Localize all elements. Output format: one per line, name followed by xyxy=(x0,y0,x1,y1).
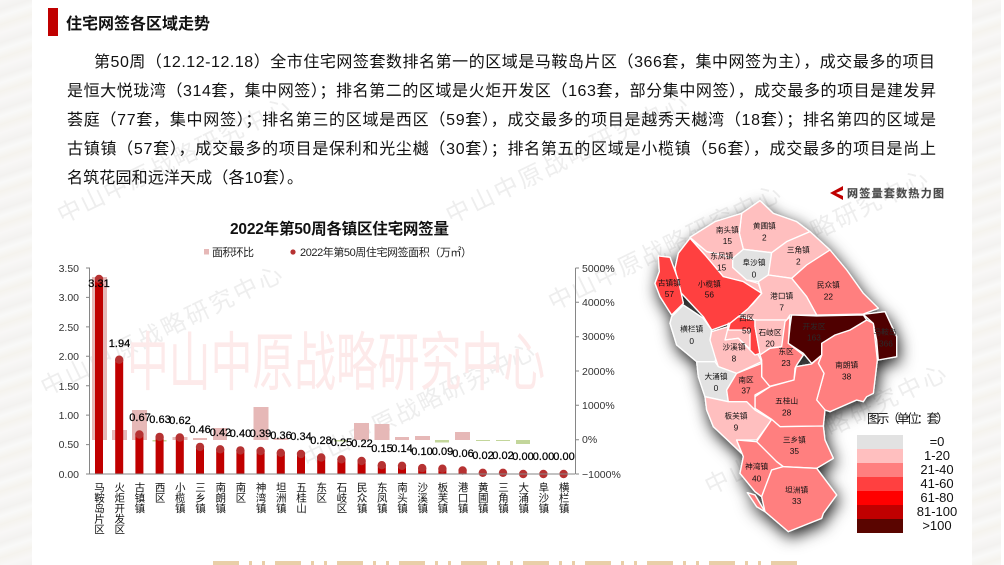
data labels: 0.02 xyxy=(472,450,494,462)
body paragraph: 荟庭（77套，集中网签）；排名第三的区域是西区（59套），成交最多的项目是越秀天樾湾（18套）；排名第四的区域是 xyxy=(67,106,936,130)
map region labels: 开发区 xyxy=(803,321,826,331)
category labels: 民众镇 xyxy=(356,482,368,514)
watermarks: 中山中原战略研究中心 xyxy=(701,360,951,500)
right axis labels: 0% xyxy=(582,434,597,446)
map region labels: 西区 xyxy=(739,314,755,323)
map region labels: 163 xyxy=(807,333,821,343)
data labels: 0.25 xyxy=(331,437,352,449)
map region labels: 22 xyxy=(824,291,833,301)
right axis labels: −1000% xyxy=(582,469,621,481)
left axis labels: 2.00 xyxy=(59,351,79,363)
data labels: 0.42 xyxy=(210,427,231,439)
category labels: 黄圃镇 xyxy=(477,481,489,514)
map legend xyxy=(857,408,957,533)
map region labels: 阜沙镇 xyxy=(743,257,766,267)
category labels: 小榄镇 xyxy=(174,482,186,514)
map region labels: 沙溪镇 xyxy=(723,342,746,352)
category labels: 三角镇 xyxy=(497,482,509,514)
map region labels: 2 xyxy=(762,233,767,243)
large pink watermark: 中山中原战略研究中心 xyxy=(127,327,545,399)
map region labels: 40 xyxy=(752,473,762,483)
map region labels: 板芙镇 xyxy=(725,411,748,421)
heat map xyxy=(655,201,897,532)
chart title: 2022年第50周各镇区住宅网签量 xyxy=(230,219,449,238)
left axis labels: 2.50 xyxy=(59,322,79,334)
category labels: 阜沙镇 xyxy=(537,481,549,514)
left axis labels: 3.50 xyxy=(59,263,79,275)
map region labels: 28 xyxy=(782,407,792,417)
map region labels: 南头镇 xyxy=(716,224,739,234)
map region labels: 民众镇 xyxy=(817,279,840,289)
category labels: 火炬开发区 xyxy=(113,482,125,534)
map region labels: 东区 xyxy=(778,346,794,356)
axes xyxy=(86,268,579,474)
map region labels: 0 xyxy=(689,336,694,346)
series: area change bars xyxy=(92,277,470,440)
category labels: 南头镇 xyxy=(396,481,408,514)
map region labels: 坦洲镇 xyxy=(785,484,808,494)
map region labels: 23 xyxy=(781,358,791,368)
map legend: >100 xyxy=(922,518,952,533)
map title: 网签量套数热力图 xyxy=(847,186,944,200)
body paragraph: 古镇镇（57套），成交最多的项目是保利和光尘樾（30套）；排名第五的区域是小榄镇（56套），成交最多的项目是尚上 xyxy=(67,135,936,159)
category labels: 横栏镇 xyxy=(558,481,570,514)
chart legend: 面积环比 xyxy=(212,246,254,259)
left axis labels xyxy=(59,263,79,481)
category labels: 古镇镇 xyxy=(133,481,145,514)
category labels: 沙溪镇 xyxy=(416,482,428,514)
category labels: 港口镇 xyxy=(457,482,469,514)
bar chart xyxy=(59,263,621,534)
map region labels: 35 xyxy=(790,446,799,456)
data labels: 0.28 xyxy=(310,435,332,447)
data labels: 0.09 xyxy=(432,446,453,458)
map region labels: 石岐区 xyxy=(759,327,782,337)
body paragraph xyxy=(67,48,936,188)
category labels: 神湾镇 xyxy=(255,481,267,514)
map legend: 1-20 xyxy=(924,448,950,463)
category labels: 板芙镇 xyxy=(436,481,448,514)
right axis labels: 4000% xyxy=(582,297,615,309)
watermarks: 中山中原战略研究中心 xyxy=(298,338,539,474)
marble border right xyxy=(972,0,1001,565)
map legend: 图示（单位：套） xyxy=(867,408,949,427)
data labels: 0.62 xyxy=(169,415,191,427)
map region labels: 57 xyxy=(665,289,674,299)
map region labels: 20 xyxy=(765,339,775,349)
category labels: 南朗镇 xyxy=(214,481,226,514)
right axis labels: 1000% xyxy=(582,400,615,412)
map region labels: 南朗镇 xyxy=(835,360,858,370)
category labels: 东凤镇 xyxy=(376,481,388,514)
map region labels: 神湾镇 xyxy=(745,461,768,471)
category labels: 三乡镇 xyxy=(194,482,206,514)
watermarks: 中山中原战略研究中心 xyxy=(37,261,287,401)
map region labels: 366 xyxy=(879,338,893,348)
map region labels: 56 xyxy=(705,290,714,300)
data labels: 0.63 xyxy=(149,414,171,426)
chart legend: 2022年第50周住宅网签面积（万㎡） xyxy=(300,244,472,260)
map region labels: 东凤镇 xyxy=(710,250,733,260)
map region labels: 南区 xyxy=(738,374,754,384)
map region labels: 9 xyxy=(734,422,739,432)
chart legend xyxy=(204,244,472,260)
category labels: 石岐区 xyxy=(335,482,347,514)
category labels: 大涌镇 xyxy=(517,481,529,514)
data labels: 0.22 xyxy=(351,438,373,450)
data labels: 0.46 xyxy=(189,424,211,436)
data labels: 0.00 xyxy=(512,451,534,463)
heading marker xyxy=(48,8,58,36)
series: sales area markers xyxy=(95,275,568,478)
data labels: 0.15 xyxy=(371,443,393,455)
map legend: 21-40 xyxy=(920,462,954,477)
body paragraph: 第50周（12.12-12.18）全市住宅网签套数排名第一的区域是马鞍岛片区（366套，集中网签为主），成交最多的项目 xyxy=(94,48,935,72)
map region labels: 港口镇 xyxy=(770,290,793,300)
right axis labels xyxy=(582,263,621,481)
body paragraph: 名筑花园和远洋天成（各10套）。 xyxy=(67,164,303,188)
map region labels: 33 xyxy=(792,496,802,506)
data labels: 0.39 xyxy=(250,428,271,440)
body paragraph: 是恒大悦珑湾（314套，集中网签）；排名第二的区域是火炬开发区（163套，部分集中网签），成交最多的项目是建发昇 xyxy=(67,77,936,101)
data labels: 0.06 xyxy=(452,448,474,460)
series: sales area bars xyxy=(95,279,467,474)
map region labels: 小榄镇 xyxy=(698,278,721,288)
right axis labels: 5000% xyxy=(582,263,615,275)
data labels: 1.94 xyxy=(109,338,130,350)
map region labels: 38 xyxy=(842,371,852,381)
map region labels: 五桂山 xyxy=(775,396,798,406)
map legend: 61-80 xyxy=(920,490,954,505)
marble border left xyxy=(0,0,32,565)
data labels: 0.14 xyxy=(391,443,413,455)
watermarks xyxy=(37,89,951,500)
category labels: 马鞍岛片区 xyxy=(93,482,105,534)
watermarks: 中山中原战略研究中心 xyxy=(442,89,692,229)
data labels: 0.00 xyxy=(533,451,554,463)
right axis labels: 3000% xyxy=(582,331,615,343)
map region labels: 15 xyxy=(717,262,727,272)
map region labels: 黄圃镇 xyxy=(753,220,776,230)
watermarks: 中山中原战略研究中心 xyxy=(544,180,785,316)
right axis labels: 2000% xyxy=(582,366,615,378)
map region labels: 8 xyxy=(732,354,737,364)
watermarks: 中山中原战略研究中心 xyxy=(691,165,932,301)
map region labels xyxy=(658,220,897,506)
category labels: 西区 xyxy=(154,482,166,503)
map region labels: 2 xyxy=(796,256,801,266)
map region labels: 0 xyxy=(752,270,757,280)
map legend: 41-60 xyxy=(920,476,954,491)
data labels: 0.02 xyxy=(492,450,514,462)
map region labels: 古镇镇 xyxy=(658,278,681,288)
data labels xyxy=(88,278,575,463)
map region labels: 0 xyxy=(714,383,719,393)
series: negative change bars xyxy=(152,440,530,444)
heading: 住宅网签各区域走势 xyxy=(66,14,210,33)
map region labels: 37 xyxy=(741,386,751,396)
data labels: 0.10 xyxy=(411,446,433,458)
category labels xyxy=(93,481,570,534)
map region labels: 三乡镇 xyxy=(783,434,806,444)
map region labels: 马鞍岛 xyxy=(874,327,897,337)
category labels: 五桂山 xyxy=(295,482,307,514)
data labels: 0.40 xyxy=(230,428,251,440)
map legend: 81-100 xyxy=(917,504,957,519)
data labels: 3.31 xyxy=(88,278,110,290)
map region labels: 横栏镇 xyxy=(680,324,703,334)
watermarks: 中山中原战略研究中心 xyxy=(53,93,294,229)
data labels: 0.00 xyxy=(553,451,575,463)
category labels: 东区 xyxy=(315,481,327,503)
bottom gold strip xyxy=(213,561,797,565)
data labels: 0.67 xyxy=(129,412,151,424)
map region labels: 大涌镇 xyxy=(705,371,728,381)
data labels: 0.34 xyxy=(290,431,312,443)
map region labels: 7 xyxy=(779,303,784,313)
category labels: 南区 xyxy=(234,481,246,503)
left axis labels: 1.00 xyxy=(59,410,79,422)
map region labels: 59 xyxy=(742,325,752,335)
data labels: 0.36 xyxy=(270,430,292,442)
map region labels: 三角镇 xyxy=(787,244,810,254)
left axis labels: 0.00 xyxy=(59,469,79,481)
map region labels: 15 xyxy=(723,236,732,246)
left axis labels: 1.50 xyxy=(59,381,79,393)
category labels: 坦洲镇 xyxy=(275,481,287,514)
map legend: =0 xyxy=(930,434,944,449)
left axis labels: 0.50 xyxy=(59,439,79,451)
left axis labels: 3.00 xyxy=(59,292,79,304)
